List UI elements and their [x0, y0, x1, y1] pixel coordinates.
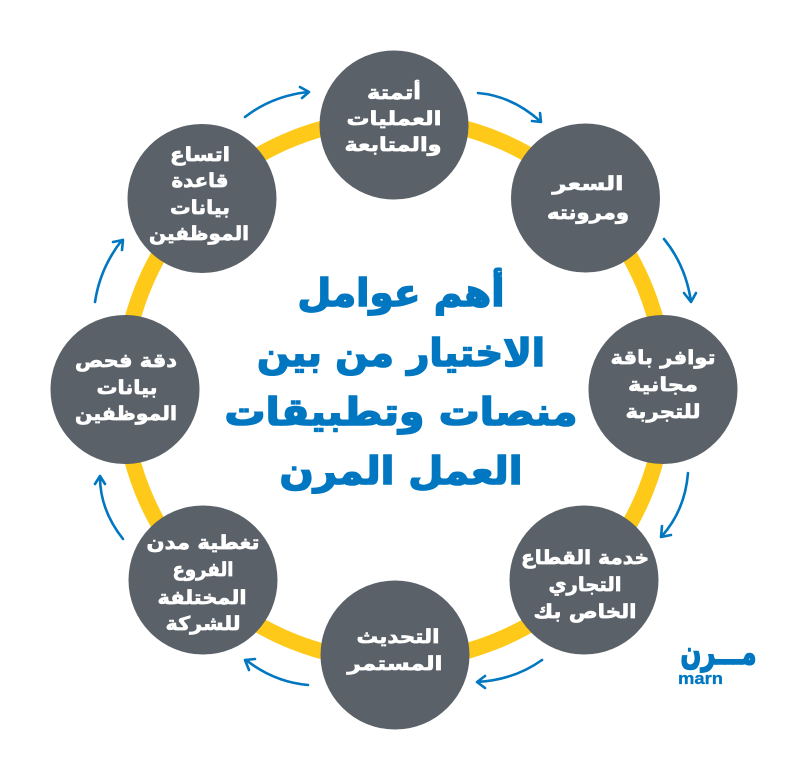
node: process automation — [320, 50, 468, 200]
node: branch coverage: الفروع — [172, 559, 234, 581]
arrow: top to upper right — [478, 93, 541, 122]
node: price and flexibility — [511, 124, 660, 272]
node: continuous update: التحديث — [356, 626, 440, 648]
node: process automation: أتمتة — [367, 80, 421, 104]
node: branch coverage — [128, 506, 278, 654]
node: free trial: توافر باقة — [610, 347, 716, 369]
arrow: lower left to left — [95, 476, 123, 539]
arrow: lower right to bottom — [477, 660, 542, 688]
node: screening accuracy: بيانات — [96, 377, 158, 399]
node: screening accuracy — [50, 315, 200, 464]
node: process automation: العمليات — [346, 108, 442, 130]
arrow: left to upper left — [95, 240, 123, 302]
node: screening accuracy: دقة فحص — [75, 350, 177, 372]
node: branch coverage: المختلفة — [158, 587, 246, 609]
logo: marn — [678, 633, 756, 688]
arrow: right to lower right — [661, 473, 688, 537]
node: employee database: بيانات — [170, 197, 230, 219]
node: employee database: الموظفين — [149, 223, 249, 245]
node: sector service: التجاري — [548, 574, 622, 597]
node: free trial — [588, 315, 738, 464]
logo: marn: marn — [678, 669, 723, 688]
node: sector service — [510, 506, 658, 654]
node: branch coverage: تغطية مدن — [146, 532, 260, 554]
node: employee database — [128, 124, 276, 273]
logo: marn: مـــرن — [680, 633, 756, 673]
title: الاختيار من بين — [257, 331, 545, 375]
node: price and flexibility: السعر — [551, 173, 624, 195]
node: free trial: مجانية — [628, 374, 698, 396]
node: employee database: اتساع — [170, 144, 230, 166]
node: sector service: خدمة القطاع — [521, 547, 649, 569]
node: continuous update: المستمر — [346, 653, 442, 675]
title: منصات وتطبيقات — [224, 390, 578, 435]
title: أهم عوامل — [298, 268, 504, 316]
arrow: bottom to lower left — [245, 659, 308, 685]
title — [224, 268, 578, 493]
node: free trial: للتجربة — [626, 401, 700, 423]
node: process automation: والمتابعة — [344, 134, 442, 156]
node: employee database: قاعدة — [172, 170, 228, 192]
yellow ring — [123, 119, 665, 661]
node: price and flexibility: ومرونته — [547, 202, 629, 224]
arrow: upper left to top — [245, 87, 309, 117]
node: screening accuracy: الموظفين — [75, 403, 177, 425]
arrow: upper right to right — [664, 239, 696, 302]
node: branch coverage: للشركة — [166, 613, 240, 635]
title: العمل المرن — [280, 449, 522, 493]
node: sector service: الخاص بك — [534, 601, 636, 623]
node: continuous update — [320, 580, 470, 730]
